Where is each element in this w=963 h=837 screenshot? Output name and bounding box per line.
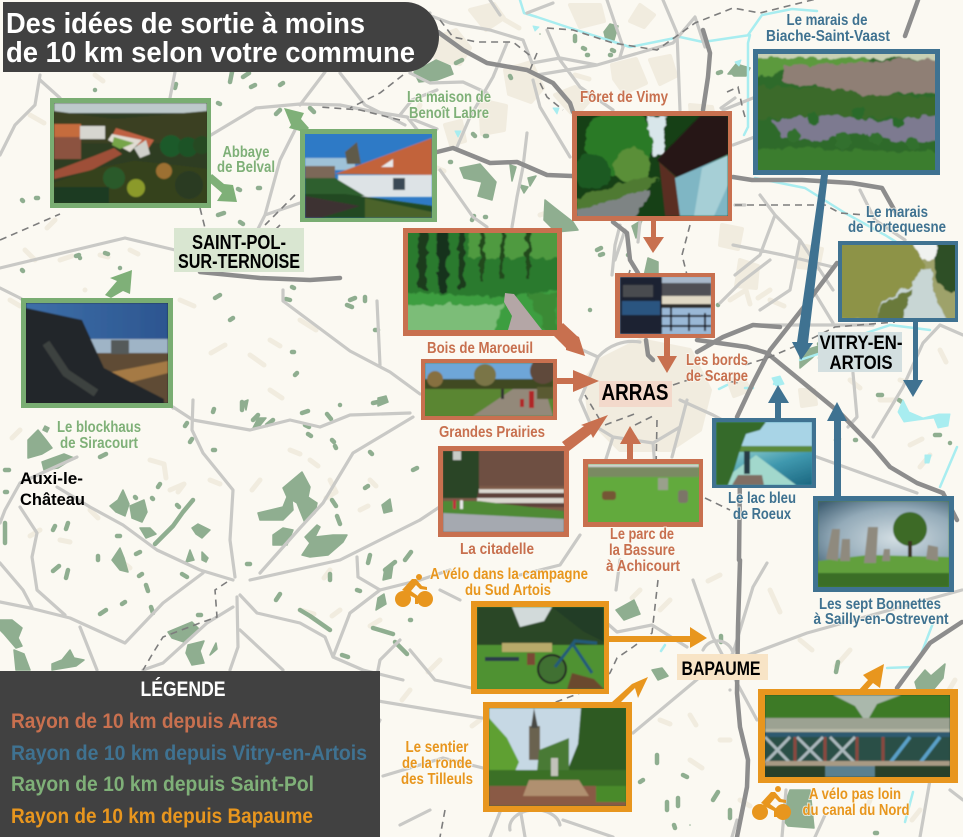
arrows: Bapaume (607, 627, 884, 706)
city label: Auxi-le-Château (20, 469, 85, 509)
photo: marais de Biache-Saint-Vaast (748, 44, 945, 180)
city label: Vitry-en-Artois (818, 332, 902, 374)
label: Le sentier de la ronde des Tilleuls (401, 739, 473, 788)
city label: Saint-Pol-sur-Ternoise (174, 228, 304, 273)
label: Le sentier de la ronde des Tilleuls: de la ronde (402, 755, 472, 772)
label: Le parc de la Bassure à Achicourt: Le parc de (610, 526, 674, 543)
title: de 10 km selon votre commune (6, 37, 415, 69)
label: La citadelle: La citadelle (460, 541, 534, 558)
label: A vélo pas loin du canal du Nord: du canal du Nord (802, 802, 910, 819)
city label: Arras: ARRAS (602, 379, 668, 405)
city label: Vitry-en-Artois: VITRY-EN- (820, 333, 902, 354)
label: Le parc de la Bassure à Achicourt: la Bassure (609, 542, 675, 559)
photo: parc de la Bassure (583, 459, 703, 527)
city label: Auxi-le-Château: Château (20, 490, 85, 509)
arrows: Saint-Pol (105, 108, 309, 298)
label: Les bords de Scarpe (686, 352, 748, 385)
title (3, 2, 439, 72)
legend: LÉGENDE (140, 678, 226, 701)
label: Le blockhaus de Siracourt: de Siracourt (60, 435, 139, 452)
label: Grandes Prairies: Grandes Prairies (439, 424, 545, 441)
label: La maison de Benoît Labre: Benoît Labre (409, 105, 489, 122)
photo: Abbaye de Belval (50, 98, 211, 208)
motorways (200, 0, 962, 837)
city label: Saint-Pol-sur-Ternoise: SUR-TERNOISE (178, 251, 300, 273)
label: Le marais de Tortequesne: de Tortequesne (848, 219, 946, 236)
label: A vélo pas loin du canal du Nord (802, 786, 910, 819)
photo: bords de Scarpe (615, 273, 715, 338)
label: Le marais de Biache-Saint-Vaast: Biache-Saint-Vaast (766, 28, 891, 45)
photo: campagne du Sud Artois (471, 601, 609, 694)
photo: citadelle (438, 446, 569, 537)
label: Le marais de Tortequesne: Le marais (866, 204, 928, 221)
photo: Grandes Prairies (421, 358, 557, 420)
arrows: Arras (552, 221, 677, 459)
label: Le marais de Biache-Saint-Vaast (766, 12, 891, 45)
photo: lac bleu de Roeux (712, 418, 816, 488)
icon: cyclist Sud Artois (395, 574, 433, 607)
icon: cyclist canal du Nord (752, 786, 791, 820)
label: Les sept Bonnettes à Sailly-en-Ostrevent: Les sept Bonnettes (819, 596, 941, 613)
photo: sept Bonnettes (813, 496, 954, 592)
label: A vélo dans la campagne du Sud Artois: du Sud Artois (465, 582, 551, 599)
label: Abbaye de Belval (217, 144, 275, 176)
photo: sentier de la ronde des Tilleuls (483, 702, 632, 812)
title: Des idées de sortie à moins (6, 8, 365, 40)
label: Le marais de Biache-Saint-Vaast: Le marais de (786, 12, 868, 29)
label: Le sentier de la ronde des Tilleuls: des Tilleuls (401, 771, 473, 788)
label: Le parc de la Bassure à Achicourt: à Achicourt (606, 558, 681, 575)
label: Le lac bleu de Roeux: Le lac bleu (728, 490, 796, 507)
label: Les bords de Scarpe: de Scarpe (686, 368, 748, 385)
label: Le lac bleu de Roeux (728, 490, 796, 523)
legend: Rayon de 10 km depuis Bapaume (11, 805, 313, 828)
legend: Rayon de 10 km depuis Vitry-en-Artois (11, 742, 367, 765)
label: Les sept Bonnettes à Sailly-en-Ostrevent (814, 596, 949, 628)
label: Le sentier de la ronde des Tilleuls: Le sentier (406, 739, 468, 756)
city label: Auxi-le-Château: Auxi-le- (20, 469, 83, 488)
photo: bois de Maroeuil (398, 223, 568, 343)
label: Le blockhaus de Siracourt: Le blockhaus (57, 419, 141, 436)
label: Abbaye de Belval: Abbaye (222, 144, 270, 161)
photo: forêt de Vimy (567, 106, 738, 226)
legend (0, 671, 380, 837)
arrows: Vitry (768, 175, 923, 497)
city label: Vitry-en-Artois: ARTOIS (830, 353, 892, 374)
label: Abbaye de Belval: de Belval (217, 159, 275, 176)
legend: Rayon de 10 km depuis Arras (11, 710, 278, 733)
label: Le blockhaus de Siracourt (57, 419, 141, 452)
label: Bois de Maroeuil: Bois de Maroeuil (427, 340, 533, 357)
label: Fôret de Vimy: Fôret de Vimy (580, 89, 668, 106)
legend: Rayon de 10 km depuis Saint-Pol (11, 773, 314, 796)
label: Les bords de Scarpe: Les bords (686, 352, 748, 369)
city label: Saint-Pol-sur-Ternoise: SAINT-POL- (192, 232, 286, 254)
photo: blockhaus de Siracourt (21, 298, 173, 408)
label: Le parc de la Bassure à Achicourt (606, 526, 681, 575)
label: La maison de Benoît Labre: La maison de (407, 89, 491, 106)
label: A vélo dans la campagne du Sud Artois: A vélo dans la campagne (430, 566, 588, 583)
photo: maison de Benoît Labre (300, 129, 437, 222)
photo: canal du Nord (758, 689, 958, 783)
label: A vélo pas loin du canal du Nord: A vélo pas loin (809, 786, 901, 803)
city label: Bapaume: BAPAUME (682, 659, 760, 680)
label: A vélo dans la campagne du Sud Artois (430, 566, 588, 599)
water (455, 0, 957, 822)
photo: marais de Tortequesne (832, 235, 963, 329)
label: Le lac bleu de Roeux: de Roeux (733, 506, 791, 523)
label: La maison de Benoît Labre (407, 89, 491, 122)
label: Le marais de Tortequesne (848, 204, 946, 236)
